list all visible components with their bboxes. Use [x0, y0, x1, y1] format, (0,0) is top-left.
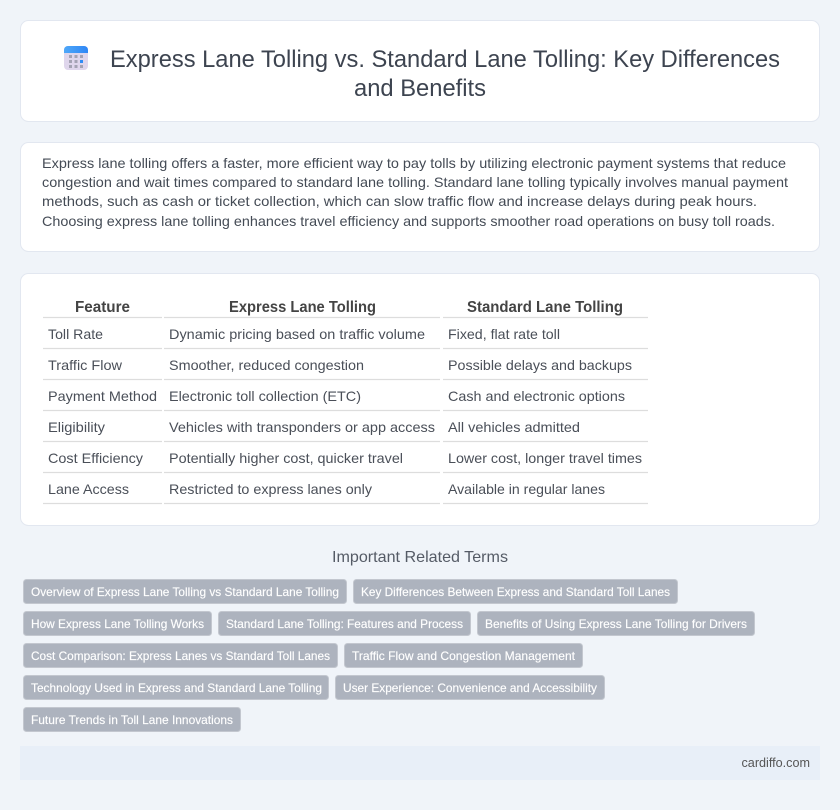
table row: payment method — [48, 388, 625, 404]
tag: Traffic Flow and Congestion Management — [352, 649, 576, 663]
table row: eligibility: All vehicles admitted — [448, 419, 580, 435]
table row: lane access: Available in regular lanes — [448, 481, 605, 497]
table row: eligibility — [48, 419, 580, 435]
table row: payment method: Payment Method — [48, 388, 157, 404]
tag: Overview of Express Lane Tolling vs Standard Lane Tolling — [31, 585, 339, 599]
table header — [75, 299, 623, 316]
table row: traffic flow: Smoother, reduced congestion — [169, 357, 364, 373]
tag — [336, 676, 604, 700]
table row: lane access: Lane Access — [48, 481, 129, 497]
tag: Future Trends in Toll Lane Innovations — [31, 713, 233, 727]
tag: Benefits of Using Express Lane Tolling for Drivers — [485, 617, 747, 631]
tag: Technology Used in Express and Standard Lane Tolling — [31, 681, 322, 695]
tag: How Express Lane Tolling Works — [31, 617, 204, 631]
table row: payment method: Electronic toll collection (ETC) — [169, 388, 361, 404]
table row: eligibility: Eligibility — [48, 419, 105, 435]
panel: introduction — [20, 142, 820, 252]
table header: Express Lane Tolling — [229, 299, 376, 316]
table row: toll rate: Toll Rate — [48, 326, 103, 342]
table row: cost efficiency — [48, 450, 642, 466]
title — [110, 46, 780, 102]
table row: lane access: Restricted to express lanes only — [169, 481, 372, 497]
table row: eligibility: Vehicles with transponders or app access — [169, 419, 435, 435]
heading: related terms: Important Related Terms — [332, 549, 508, 566]
table row: lane access — [48, 481, 605, 497]
table row: toll rate: Fixed, flat rate toll — [448, 326, 560, 342]
text block: introduction — [42, 155, 788, 229]
title: Express Lane Tolling vs. Standard Lane Tolling: Key Differences — [110, 46, 780, 73]
table row: traffic flow: Traffic Flow — [48, 357, 123, 373]
table row: traffic flow — [48, 357, 632, 373]
tag: Key Differences Between Express and Standard Toll Lanes — [361, 585, 670, 599]
icon: calendar — [64, 46, 88, 70]
text block: introduction: Choosing express lane tolling enhances travel efficiency and supports smoother road operations on busy toll roads. — [42, 213, 775, 229]
tag — [478, 612, 754, 636]
table row: cost efficiency: Potentially higher cost, quicker travel — [169, 450, 403, 466]
footer: cardiffo.com — [742, 755, 810, 770]
text block: introduction: congestion and wait times compared to standard lane tolling. Standard lane tolling typically involves manual payment — [42, 174, 788, 190]
table row: toll rate: Dynamic pricing based on traffic volume — [169, 326, 425, 342]
title: and Benefits — [354, 75, 486, 102]
tag: Cost Comparison: Express Lanes vs Standard Toll Lanes — [31, 649, 330, 663]
table header: Feature — [75, 299, 130, 316]
text block: introduction: methods, such as cash or ticket collection, which can slow traffic flow and increase delays during peak hours. — [42, 193, 757, 209]
tag — [354, 580, 678, 604]
panel: header — [20, 20, 820, 122]
table row: cost efficiency: Cost Efficiency — [48, 450, 143, 466]
table row: cost efficiency: Lower cost, longer travel times — [448, 450, 642, 466]
text block: introduction: Express lane tolling offers a faster, more efficient way to pay tolls by utilizing electronic payment systems that reduce — [42, 155, 786, 171]
tag: User Experience: Convenience and Accessibility — [343, 681, 597, 695]
table row: payment method: Cash and electronic options — [448, 388, 625, 404]
tag: Standard Lane Tolling: Features and Process — [226, 617, 463, 631]
tag — [344, 644, 582, 668]
table row: toll rate — [48, 326, 560, 342]
tag — [218, 612, 470, 636]
table row: traffic flow: Possible delays and backups — [448, 357, 632, 373]
tag — [24, 612, 212, 636]
tag list: related terms — [24, 580, 754, 732]
tag — [24, 644, 338, 668]
panel: comparison table — [20, 274, 820, 526]
tag — [24, 580, 346, 604]
table header: Standard Lane Tolling — [467, 299, 623, 316]
footer — [20, 746, 820, 780]
tag — [24, 676, 328, 700]
tag — [24, 708, 240, 732]
